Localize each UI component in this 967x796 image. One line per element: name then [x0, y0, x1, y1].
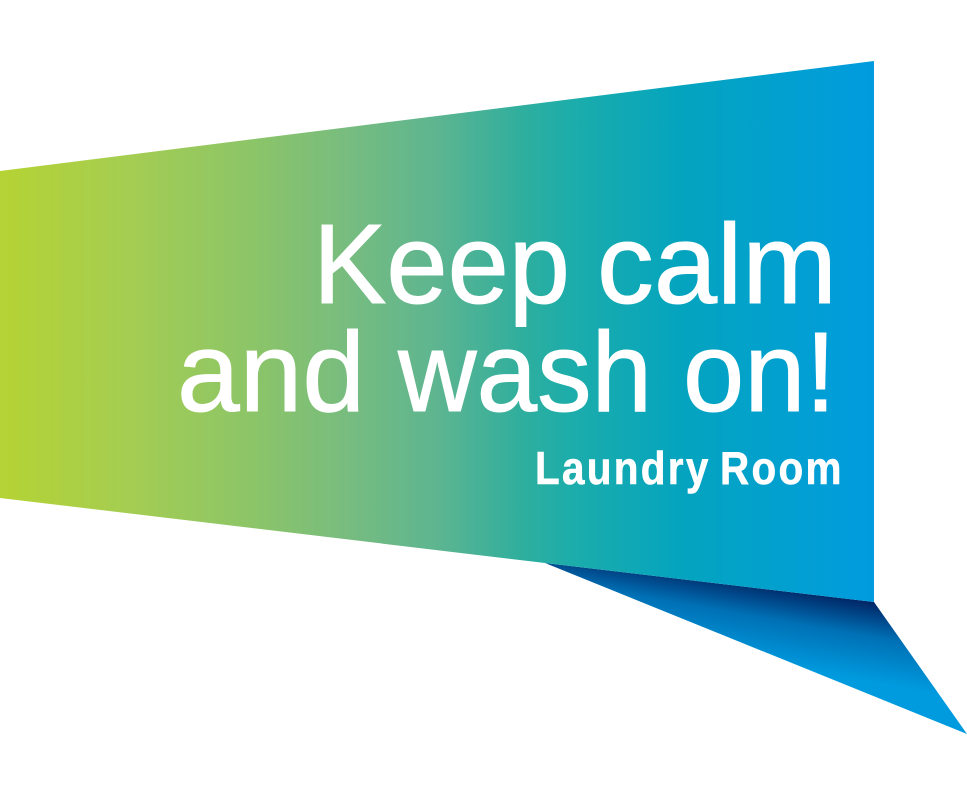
folded ribbon tail [545, 563, 967, 734]
headline line 1 [313, 201, 837, 327]
subheading [535, 444, 841, 495]
headline line 2: wash [397, 309, 652, 435]
headline [177, 201, 837, 435]
headline line 1: Keep [313, 201, 570, 327]
subheading: Laundry [535, 444, 708, 495]
subheading: Room [720, 444, 841, 495]
headline line 2: and [177, 309, 365, 435]
headline line 2 [177, 309, 836, 435]
headline line 2: on! [683, 309, 836, 435]
gradient banner panel [0, 61, 874, 602]
headline line 1: calm [597, 201, 837, 327]
